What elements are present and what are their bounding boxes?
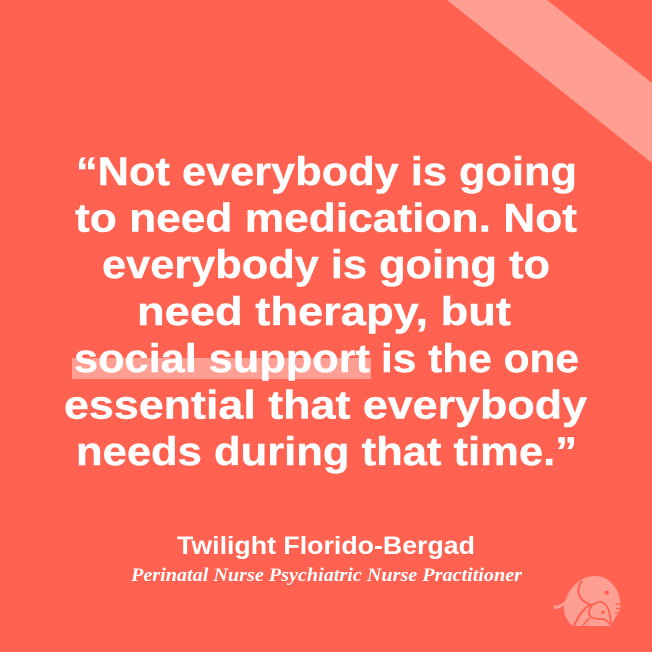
quote text: is the one bbox=[381, 337, 579, 381]
quote text: need therapy, but bbox=[137, 290, 511, 334]
quote text: to need medication. Not bbox=[75, 196, 577, 240]
quote text: essential that everybody bbox=[64, 384, 588, 428]
quote text: everybody is going to bbox=[102, 243, 550, 287]
highlight behind social support bbox=[72, 358, 371, 379]
quote text bbox=[64, 150, 588, 474]
attribution role: Perinatal Nurse Psychiatric Nurse Practitioner bbox=[130, 566, 523, 586]
icon: elephant logo bbox=[553, 576, 621, 626]
diagonal corner band bbox=[447, 0, 652, 163]
quote text: social support bbox=[74, 337, 370, 381]
quote text: “Not everybody is going bbox=[76, 150, 577, 194]
quote text: needs during that time.” bbox=[76, 430, 577, 474]
attribution name: Twilight Florido-Bergad bbox=[177, 532, 475, 560]
